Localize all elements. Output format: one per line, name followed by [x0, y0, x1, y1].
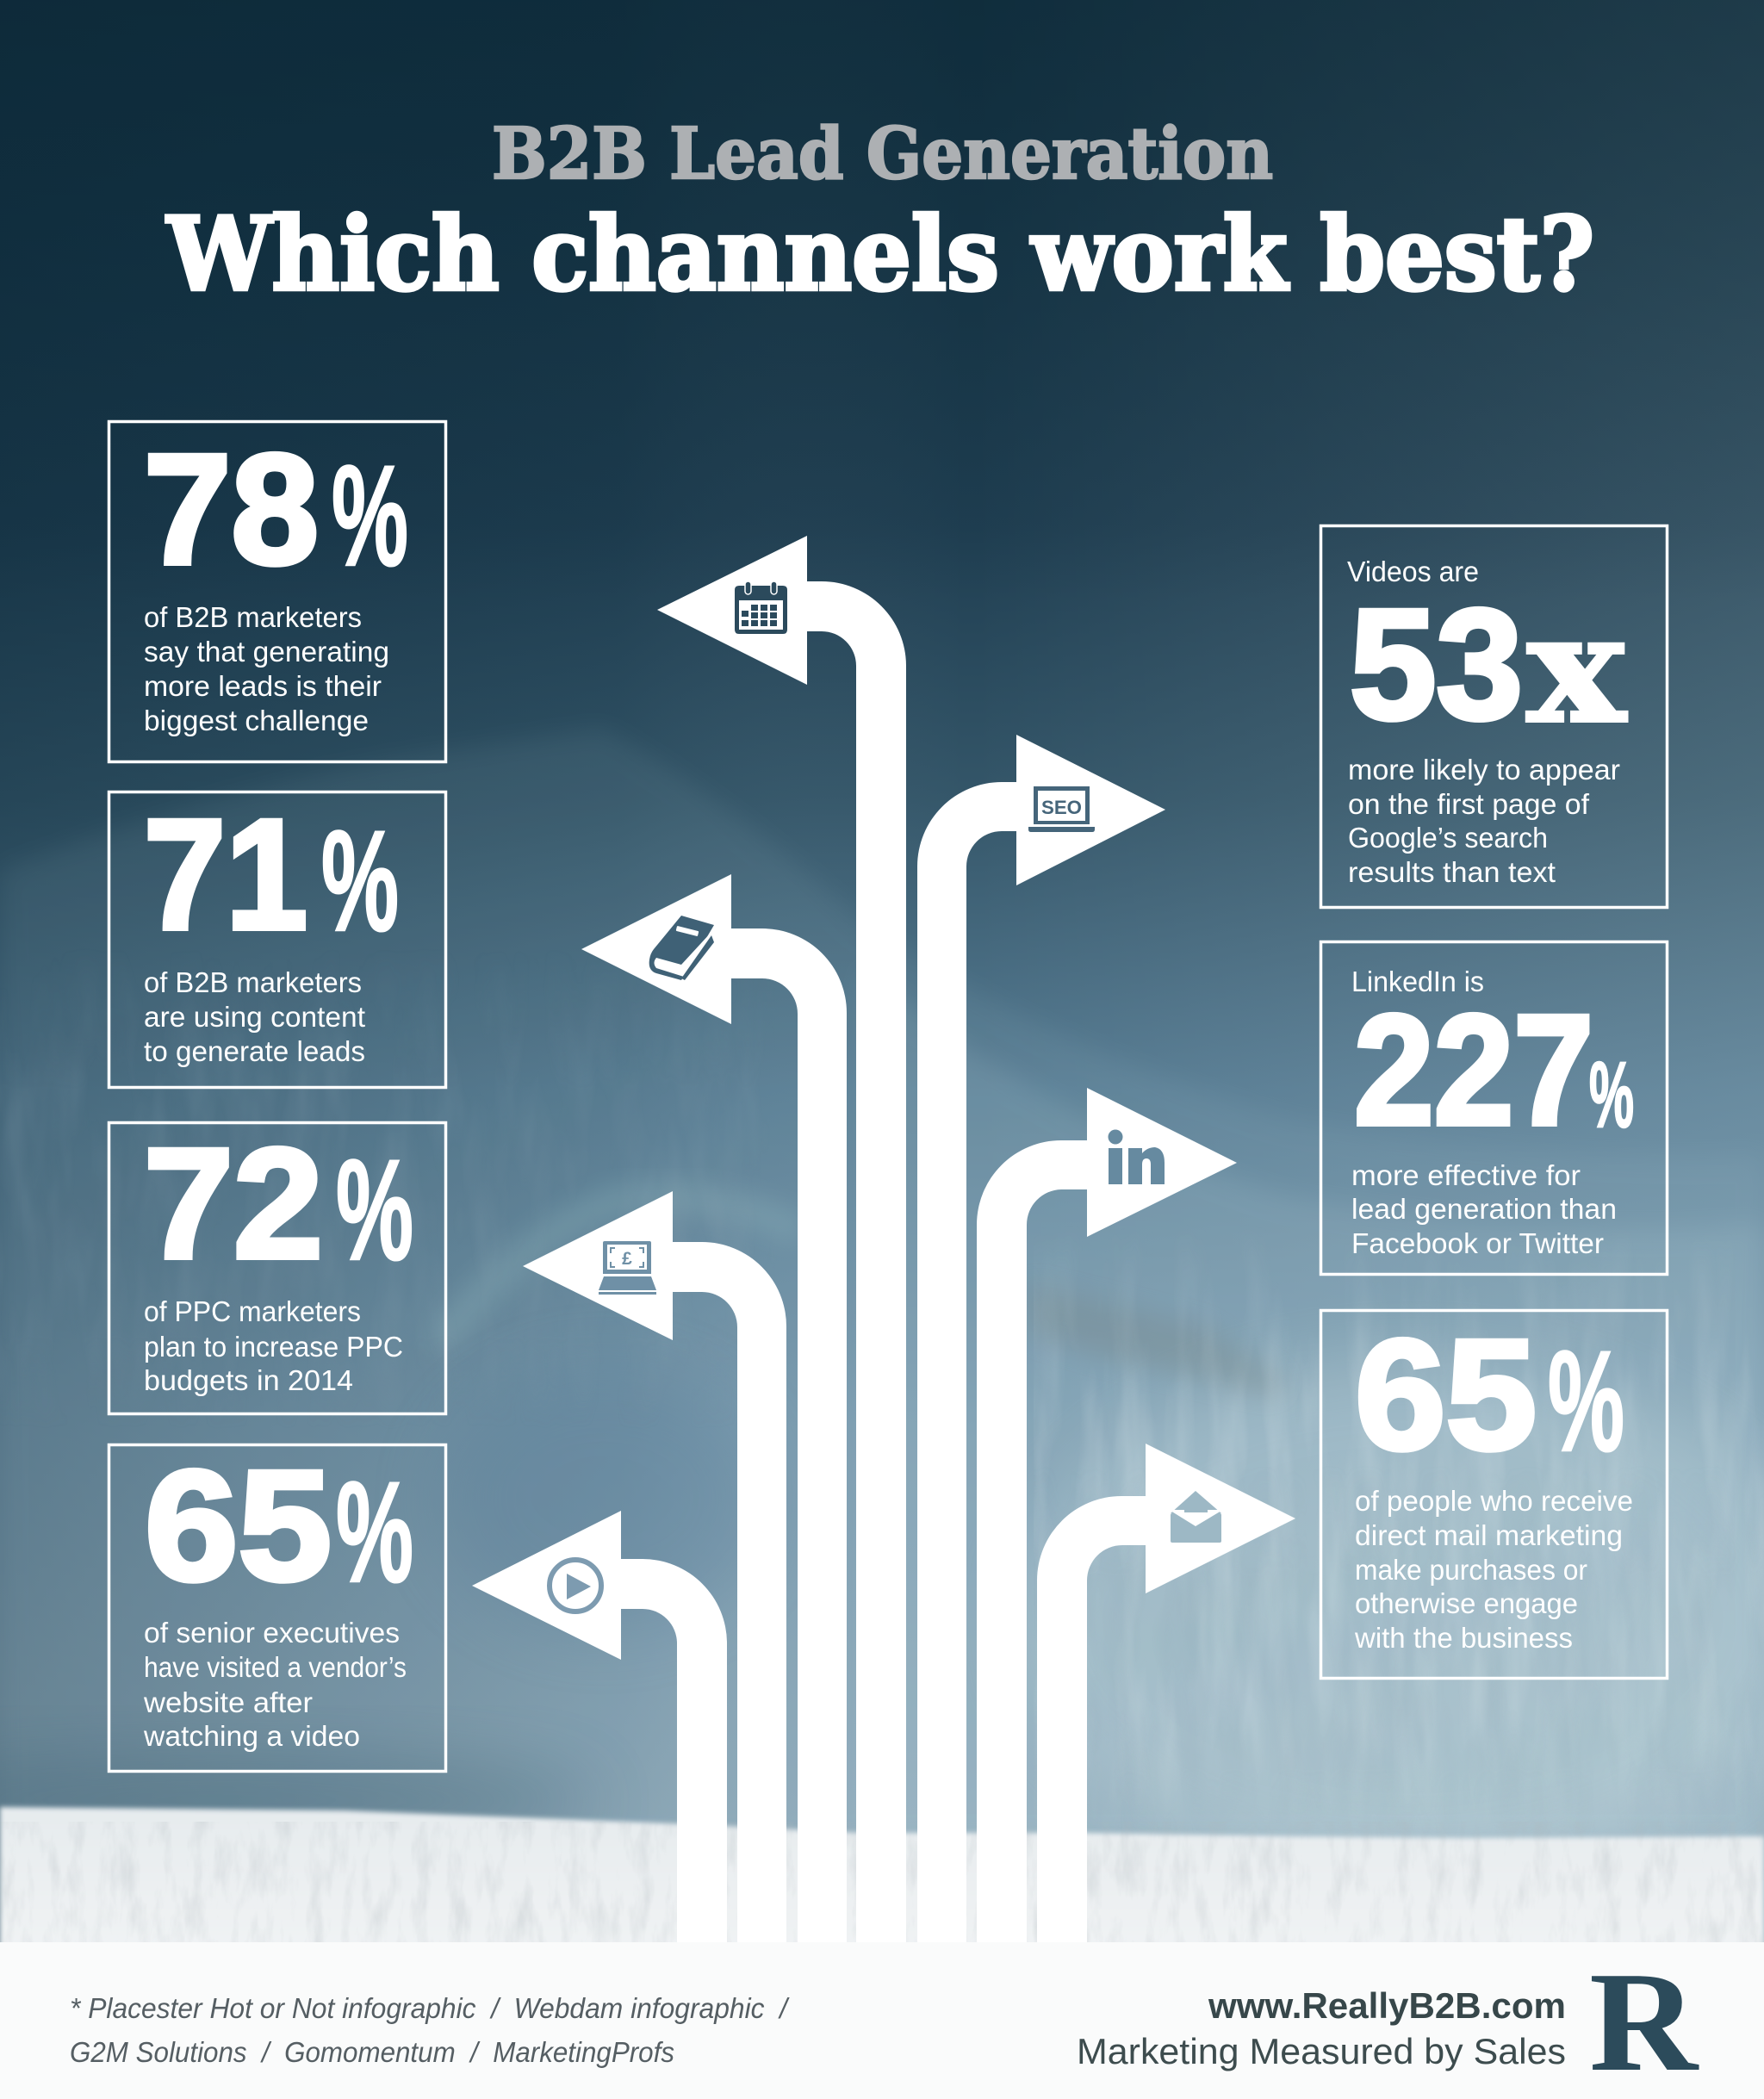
text: description: of B2B marketers — [144, 966, 362, 998]
stat 65%: 65 — [145, 1438, 332, 1613]
text: description: biggest challenge — [144, 705, 369, 736]
panel: 227% — [1321, 942, 1668, 1275]
text: intro: LinkedIn is — [1351, 966, 1484, 997]
stat 71%: 71 — [144, 786, 307, 962]
text: description: direct mail marketing — [1355, 1519, 1623, 1551]
stat 72%: % — [336, 1131, 413, 1290]
panel: 65% executives — [109, 1438, 446, 1771]
stat 65% — [1355, 1307, 1624, 1482]
arrow: calendar — [657, 536, 906, 1942]
text: description: with the business — [1354, 1622, 1573, 1654]
stat 227%: % — [1589, 1042, 1634, 1146]
text: description: Facebook or Twitter — [1351, 1227, 1604, 1259]
text: description: say that generating — [144, 636, 389, 668]
stat 71%: % — [321, 802, 399, 961]
text: description: lead generation than — [1351, 1193, 1617, 1225]
stat 53x: x — [1527, 581, 1627, 756]
stat 65% — [145, 1438, 413, 1613]
text: description: otherwise engage — [1355, 1587, 1578, 1619]
stat 65%: % — [336, 1453, 413, 1612]
text: description: of people who receive — [1355, 1485, 1633, 1517]
panel: 71% — [109, 786, 446, 1087]
text: description: more leads is their — [144, 670, 382, 702]
text: description: have visited a vendor’s — [144, 1651, 407, 1683]
panel: 53x — [1321, 525, 1668, 908]
text: description: plan to increase PPC — [144, 1331, 403, 1363]
title line 1: B2B Lead Generation — [492, 113, 1273, 196]
icon: SEO laptop — [1028, 786, 1095, 832]
text: description: of B2B marketers — [144, 601, 362, 633]
text: description — [1348, 754, 1620, 888]
icon: envelope — [1171, 1491, 1221, 1543]
title line 2: Which channels work best? — [165, 195, 1594, 314]
text: description: website after — [143, 1686, 313, 1718]
text: description: results than text — [1348, 856, 1556, 888]
footer band — [0, 1942, 1764, 2099]
logo R: R — [1589, 1942, 1699, 2099]
stat 72%: 72 — [144, 1115, 323, 1291]
stat 53x — [1350, 576, 1627, 756]
stat 53x: 53 — [1350, 576, 1523, 752]
text: description — [143, 1617, 407, 1752]
icon: SEO laptop: SEO — [1041, 797, 1082, 818]
arrow: video — [472, 1511, 727, 1942]
text: description: make purchases or — [1355, 1554, 1587, 1586]
text: description — [144, 966, 365, 1067]
text: description: on the first page of — [1348, 788, 1590, 820]
footer: sources: G2M Solutions / Gomomentum / MarketingProfs — [70, 2036, 674, 2068]
stat 78%: 78 — [144, 421, 319, 597]
arrow: SEO — [917, 735, 1165, 1942]
footer: sources — [70, 1992, 790, 2068]
stat 72% — [144, 1115, 413, 1291]
text: description — [144, 601, 389, 736]
text: description: of PPC marketers — [144, 1295, 361, 1327]
footer: sources: * Placester Hot or Not infographic / Webdam infographic / — [70, 1992, 790, 2024]
stat 78%: % — [332, 437, 408, 596]
text: description — [1354, 1485, 1633, 1654]
text: description: to generate leads — [144, 1035, 365, 1067]
brand tagline: Marketing Measured by Sales — [1077, 2031, 1566, 2071]
arrow: email — [1037, 1444, 1295, 1942]
text: description: are using content — [144, 1001, 365, 1033]
arrow: book — [581, 874, 847, 1942]
stat 78% — [144, 421, 408, 597]
stat 65%: 65 — [1355, 1307, 1537, 1482]
icon: laptop with pound sign — [599, 1241, 656, 1295]
panel: 72% — [109, 1115, 446, 1414]
text: intro: Videos are — [1347, 556, 1479, 587]
text: description: more effective for — [1351, 1159, 1581, 1191]
text: description — [1351, 1159, 1617, 1259]
panel: 78% — [109, 421, 446, 761]
brand url: www.ReallyB2B.com — [1208, 1985, 1566, 2026]
text: description: budgets in 2014 — [144, 1364, 353, 1396]
arrow: PPC laptop — [523, 1191, 786, 1942]
text: description: of senior executives — [144, 1617, 400, 1649]
panel: 65% direct mail — [1321, 1307, 1668, 1678]
text: description: watching a video — [143, 1720, 360, 1752]
text: description: more likely to appear — [1348, 754, 1620, 786]
icon: laptop with pound sign: £ — [622, 1249, 632, 1269]
icon: LinkedIn — [1108, 1130, 1165, 1184]
footer: brand — [1077, 1942, 1699, 2099]
icon: play button — [550, 1560, 601, 1612]
text: description: Google’s search — [1348, 822, 1548, 854]
arrow: LinkedIn — [977, 1088, 1237, 1942]
title — [165, 113, 1594, 314]
stat 227%: 227 — [1354, 982, 1593, 1158]
icon: calendar — [735, 581, 787, 634]
icon: book — [649, 916, 714, 980]
text: description — [144, 1295, 403, 1396]
stat 71% — [144, 786, 399, 962]
stat 65%: % — [1548, 1322, 1624, 1481]
